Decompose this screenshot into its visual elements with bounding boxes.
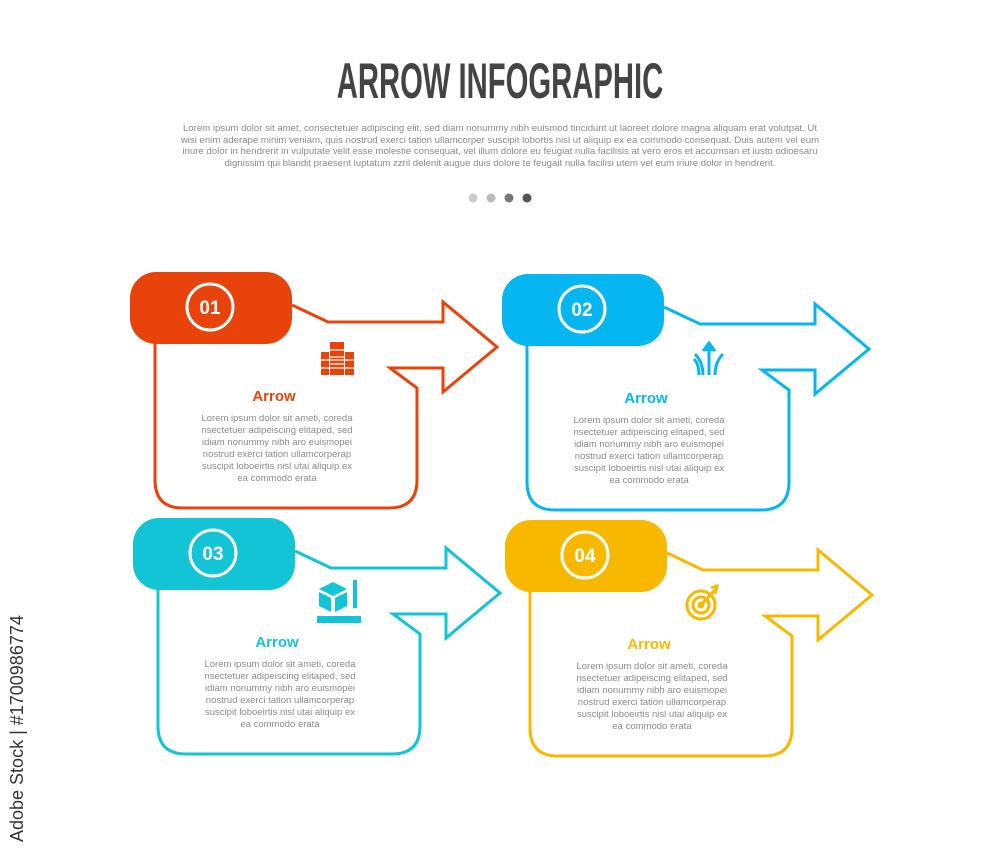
icon: split arrows: [694, 343, 723, 375]
text 03: Lorem ipsum dolor sit ameti, coreda: [204, 659, 356, 670]
badge 02: [502, 274, 664, 346]
text 02: [573, 415, 725, 486]
text 01: ea commodo erata: [237, 473, 317, 484]
intro paragraph: dignissim qui blandit praesent luptatum zzril delenit augue duis dolore te feugait nulla facilisi utem vel eum iriure dolor in hendrerit.: [225, 158, 775, 169]
badge 01: 01: [199, 298, 221, 319]
heading 02: Arrow: [624, 390, 668, 407]
intro paragraph: [180, 123, 819, 169]
title: ARROW INFOGRAPHIC: [337, 53, 663, 109]
badge 02: 02: [571, 300, 593, 321]
badge 03: [133, 518, 295, 590]
intro paragraph: wisi enim aderape minim veniam, quis nostrud exerci tation ullamcorper suscipit lobortis nisl ut aliquip ex ea commodo consequat. Duis autem vel eum: [181, 135, 819, 146]
intro paragraph: iriure dolor in hendrerit in vulputate velit esse molestie consequat, vel illum dolore eu feugiat nulla facilisis at vero eros et accumsan et iusto odioesaru: [182, 146, 818, 157]
text 02: suscipit loboeirtis nisl utai aliquip ex: [574, 463, 724, 474]
text 01: idiam nonummy nibh aro euismopei: [202, 437, 352, 448]
icon: target: [687, 586, 717, 619]
side credit: Adobe Stock | #1700986774: [7, 615, 27, 842]
panel 03: [133, 518, 500, 754]
intro paragraph: Lorem ipsum dolor sit amet, consectetuer adipiscing elit, sed diam nonummy nibh euismod tincidunt ut laoreet dolore magna aliquam erat volutpat. Ut: [183, 123, 817, 134]
panel 01: [130, 272, 497, 508]
badge 01: [130, 272, 292, 344]
panel 02: [502, 274, 869, 510]
icon: cube and ruler: [317, 580, 361, 623]
arrow outline 02: [527, 304, 869, 510]
badge 03: 03: [202, 544, 224, 565]
text 03: suscipit loboeirtis nisl utai aliquip ex: [205, 707, 355, 718]
text 03: nsectetuer adipeiscing elitaped, sed: [204, 671, 356, 682]
text 01: Lorem ipsum dolor sit ameti, coreda: [201, 413, 353, 424]
text 04: [576, 661, 728, 732]
text 03: idiam nonummy nibh aro euismopei: [205, 683, 355, 694]
heading 03: Arrow: [255, 634, 299, 651]
text 02: nostrud exerci tation ullamcorperap: [575, 451, 723, 462]
text 04: ea commodo erata: [612, 721, 692, 732]
text 04: nsectetuer adipeiscing elitaped, sed: [576, 673, 728, 684]
text 02: ea commodo erata: [609, 475, 689, 486]
icon: buildings: [321, 342, 354, 375]
arrow outline 01: [155, 302, 497, 508]
text 01: nsectetuer adipeiscing elitaped, sed: [201, 425, 353, 436]
text 01: nostrud exerci tation ullamcorperap: [203, 449, 351, 460]
text 02: idiam nonummy nibh aro euismopei: [574, 439, 724, 450]
text 01: suscipit loboeirtis nisl utai aliquip ex: [202, 461, 352, 472]
text 03: nostrud exerci tation ullamcorperap: [206, 695, 354, 706]
pagination dots: [468, 194, 532, 202]
text 04: idiam nonummy nibh aro euismopei: [577, 685, 727, 696]
badge 04: [505, 520, 667, 592]
arrow outline 03: [158, 548, 500, 754]
panel 04: [505, 520, 872, 756]
text 02: Lorem ipsum dolor sit ameti, coreda: [573, 415, 725, 426]
text 04: Lorem ipsum dolor sit ameti, coreda: [576, 661, 728, 672]
text 04: nostrud exerci tation ullamcorperap: [578, 697, 726, 708]
arrow outline 04: [530, 550, 872, 756]
text 04: suscipit loboeirtis nisl utai aliquip ex: [577, 709, 727, 720]
heading 01: Arrow: [252, 388, 296, 405]
text 02: nsectetuer adipeiscing elitaped, sed: [573, 427, 725, 438]
badge 04: 04: [574, 546, 596, 567]
text 03: [204, 659, 356, 730]
text 03: ea commodo erata: [240, 719, 320, 730]
heading 04: Arrow: [627, 636, 671, 653]
text 01: [201, 413, 353, 484]
